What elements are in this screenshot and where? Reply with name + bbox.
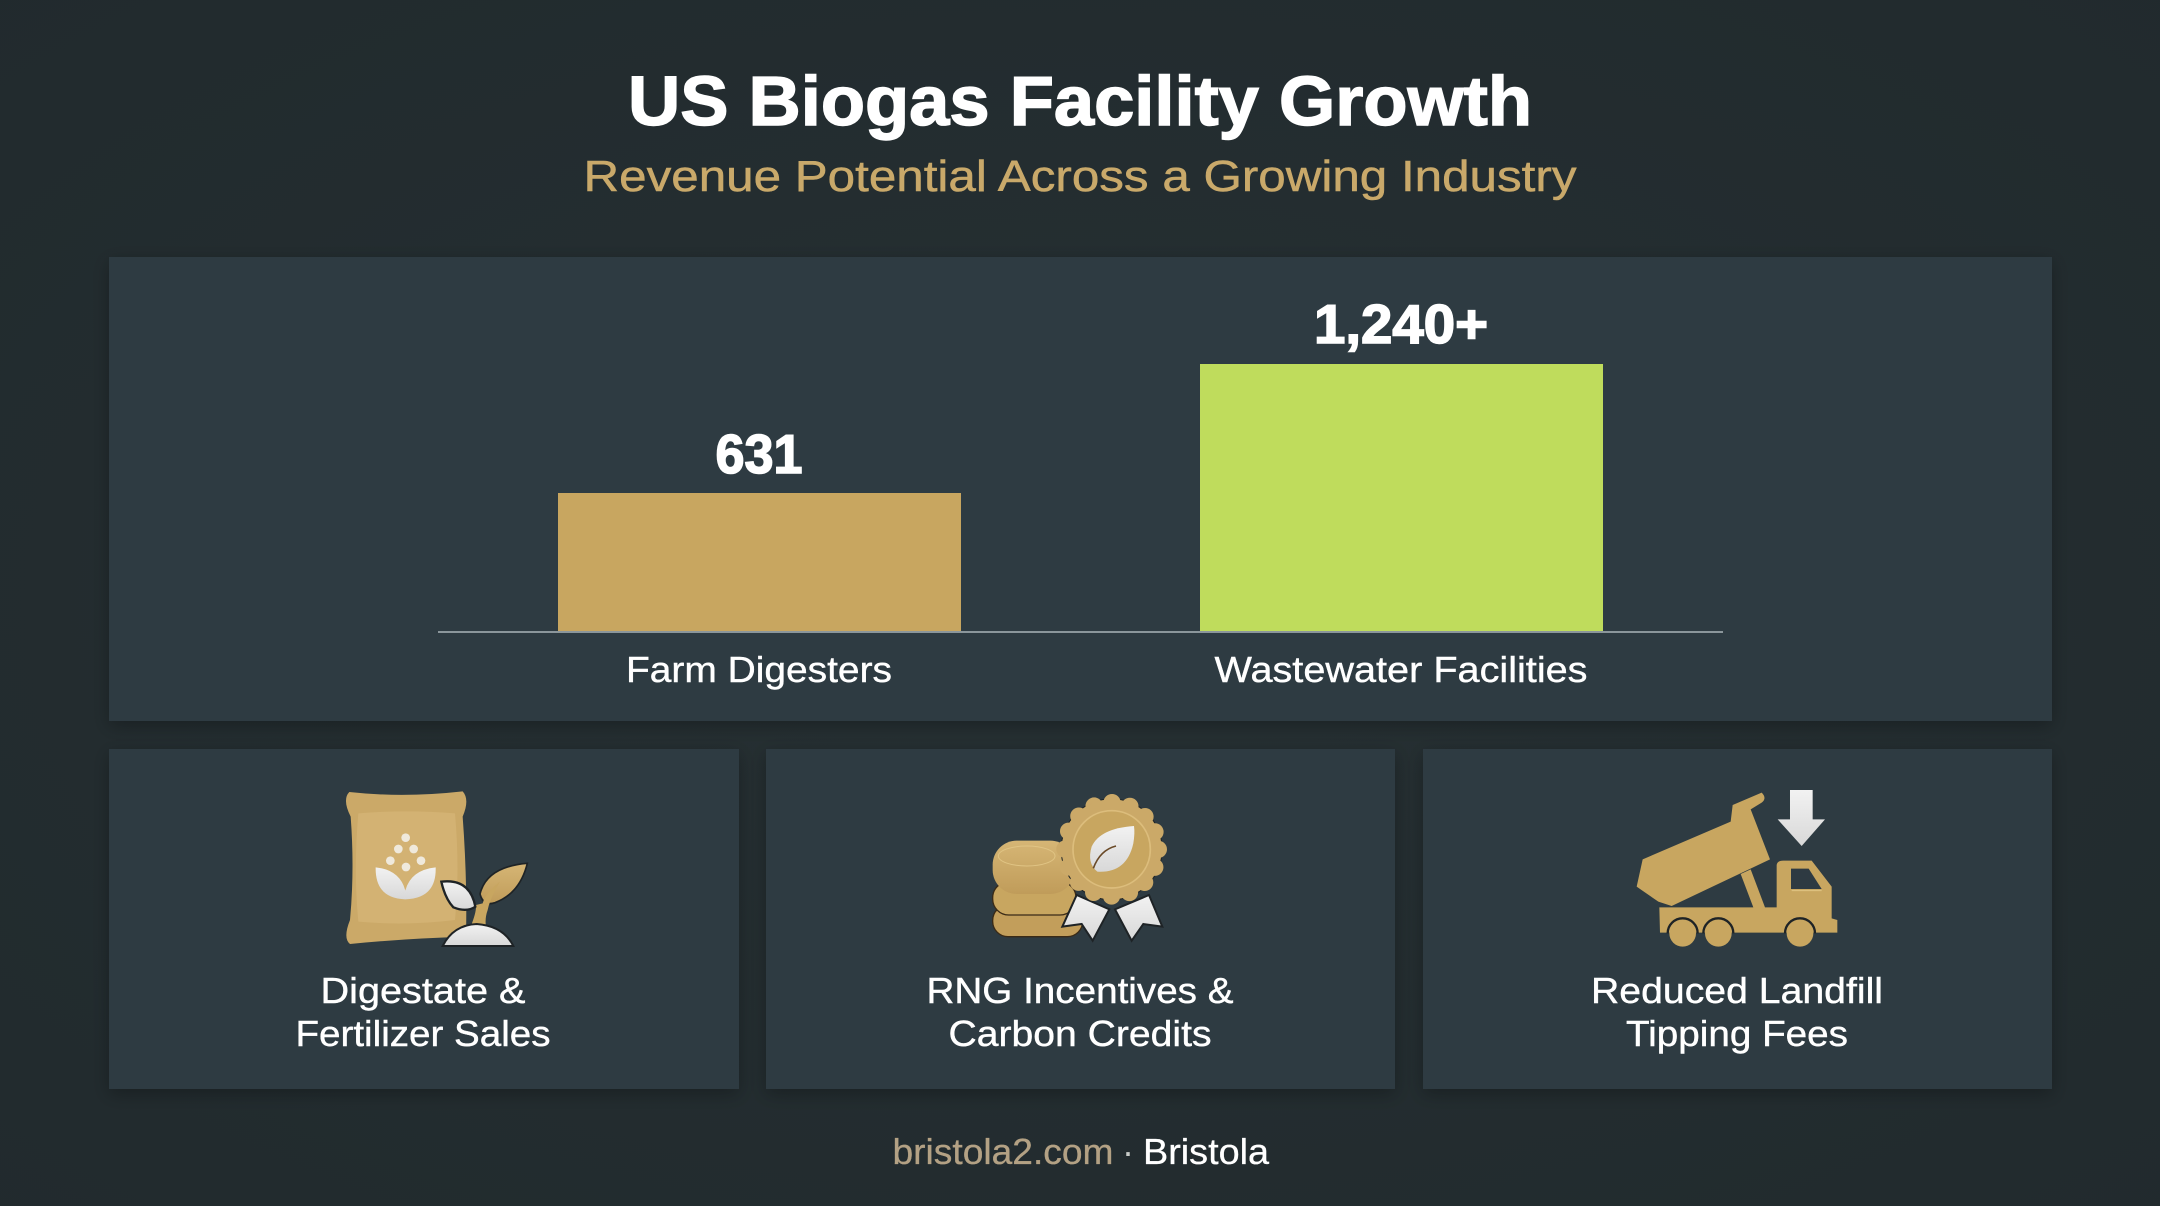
card label: Carbon Credits	[948, 1013, 1212, 1054]
card label: Digestate &	[320, 970, 526, 1011]
icon: fertilizer bag with sprout	[346, 791, 527, 946]
icon: coins and medal	[993, 799, 1162, 941]
panel: rng incentives and carbon credits	[766, 749, 1395, 1089]
panel: bar chart	[109, 257, 2052, 721]
subtitle: Revenue Potential Across a Growing Industry	[584, 152, 1576, 201]
bar: wastewater facilities: 1,240+	[1314, 293, 1488, 355]
card label: Fertilizer Sales	[296, 1013, 550, 1054]
panel: reduced landfill tipping fees	[1423, 749, 2052, 1089]
panel: digestate and fertilizer sales	[109, 749, 739, 1089]
footer	[892, 1131, 1270, 1172]
footer: Bristola	[1143, 1131, 1270, 1172]
footer: ·	[1122, 1131, 1134, 1172]
icon: dump truck with down arrow	[1637, 790, 1837, 947]
bar: farm digesters	[558, 423, 961, 690]
card label: Tipping Fees	[1626, 1013, 1848, 1054]
footer: bristola2.com	[892, 1131, 1114, 1172]
title: US Biogas Facility Growth	[628, 62, 1532, 140]
card label: Reduced Landfill	[1591, 970, 1883, 1011]
bar: wastewater facilities	[1200, 293, 1603, 690]
bar: farm digesters: 631	[716, 423, 802, 485]
bar: farm digesters: Farm Digesters	[626, 649, 892, 690]
bar: wastewater facilities: Wastewater Facilities	[1214, 649, 1588, 690]
card label: RNG Incentives &	[926, 970, 1234, 1011]
